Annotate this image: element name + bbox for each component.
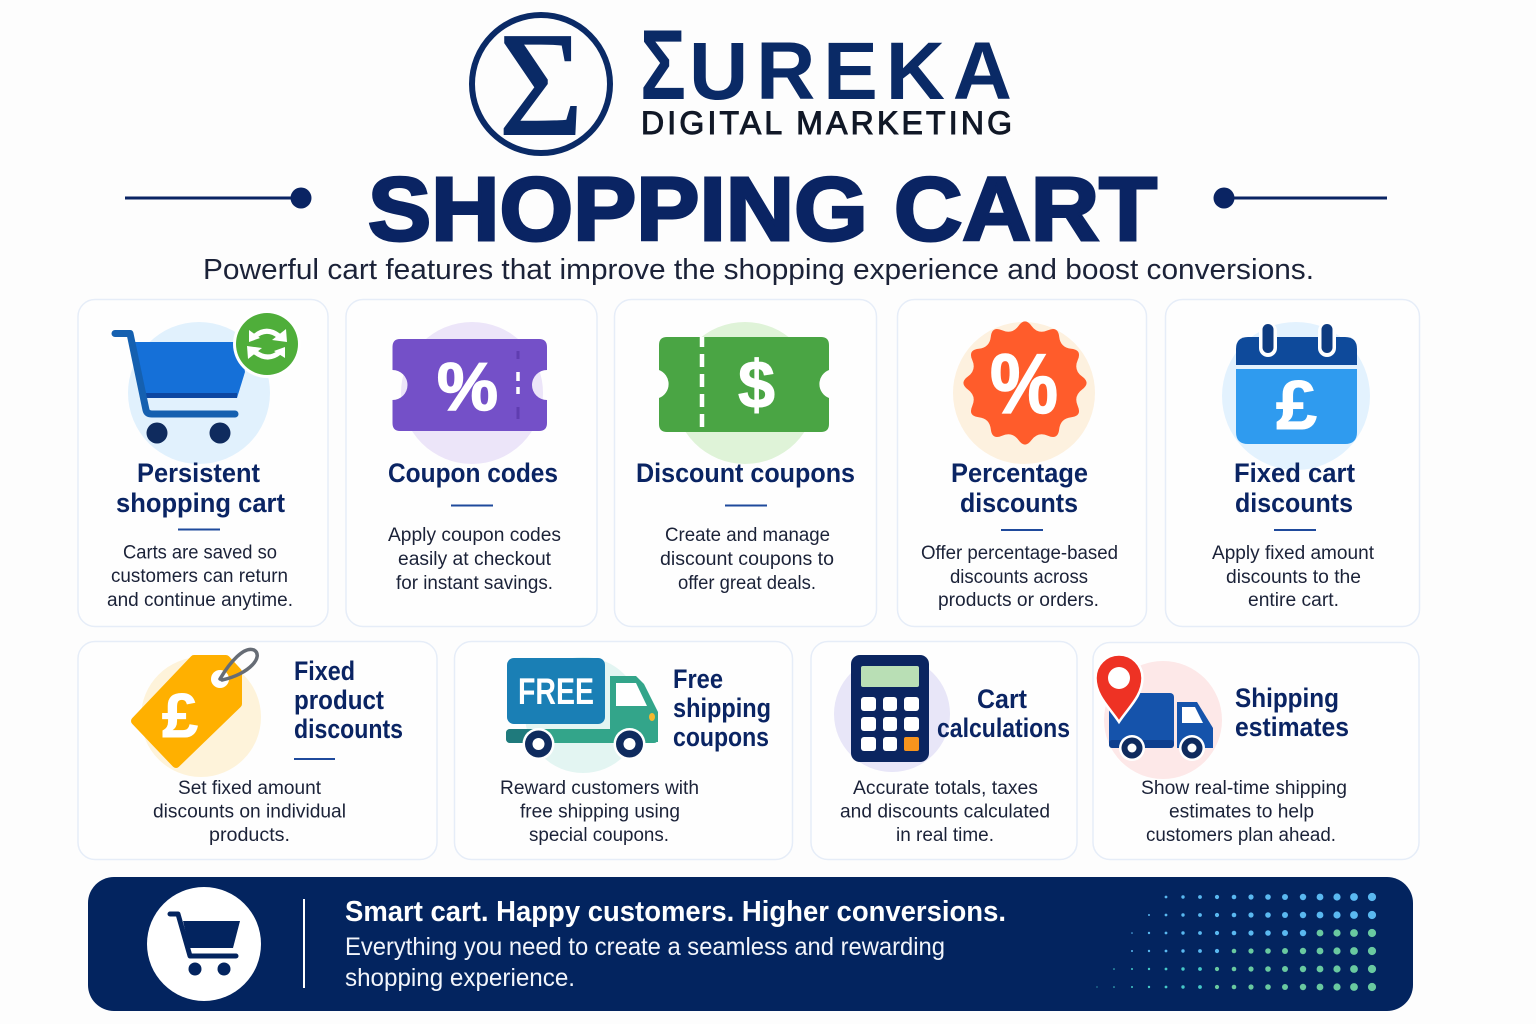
description: special coupons. xyxy=(529,825,669,846)
title: SHOPPING CART xyxy=(368,160,1157,260)
description xyxy=(660,525,834,594)
icon: blue calendar with pound sign: £ xyxy=(1276,366,1317,444)
description: products or orders. xyxy=(938,590,1099,611)
logo: Eureka Digital Marketing xyxy=(472,3,1012,167)
description: easily at checkout xyxy=(398,549,552,570)
description: Show real-time shipping xyxy=(1141,778,1347,799)
panel: shipping estimates xyxy=(1093,642,1419,860)
icon: yellow price tag xyxy=(135,649,261,777)
panel: cart calculations xyxy=(811,642,1077,860)
banner headline: Smart cart. Happy customers. Higher conversions. xyxy=(345,896,1006,928)
icon: shopping cart with sync badge xyxy=(115,310,301,464)
icon: yellow price tag: £ xyxy=(162,682,198,751)
icon: free delivery truck xyxy=(506,657,658,773)
dot pattern xyxy=(1096,893,1376,991)
description: Apply coupon codes xyxy=(388,525,561,546)
heading: Free xyxy=(673,664,723,694)
icon: green dollar ticket xyxy=(659,322,829,464)
icon: purple coupon ticket: % xyxy=(437,349,498,425)
banner text xyxy=(345,933,945,992)
heading xyxy=(673,664,771,752)
panel: discount coupons xyxy=(614,300,876,626)
heading: discounts xyxy=(294,714,403,744)
logo emblem: sigma in circle: Σ xyxy=(499,3,583,167)
heading: Shipping xyxy=(1235,683,1339,713)
description: discounts to the xyxy=(1226,567,1361,588)
heading: shipping xyxy=(673,693,771,723)
description: Offer percentage-based xyxy=(921,543,1118,564)
description xyxy=(1141,778,1347,846)
heading: shopping cart xyxy=(116,488,285,518)
description: Apply fixed amount xyxy=(1212,543,1375,564)
panel: free shipping coupons xyxy=(454,642,792,860)
description: Reward customers with xyxy=(500,778,699,799)
description: discount coupons to xyxy=(660,549,834,570)
heading: Cart xyxy=(977,684,1027,714)
description: and continue anytime. xyxy=(107,590,293,611)
description: Accurate totals, taxes xyxy=(853,778,1038,799)
description: free shipping using xyxy=(520,802,680,822)
logo wordmark letters: UREKA xyxy=(689,26,1012,117)
description: and discounts calculated xyxy=(840,802,1050,822)
description xyxy=(153,778,346,846)
icon: delivery truck with location pin xyxy=(1096,654,1222,779)
description: entire cart. xyxy=(1248,590,1339,611)
heading xyxy=(951,458,1088,518)
heading: product xyxy=(294,685,384,715)
description xyxy=(1212,543,1375,611)
panel: persistent shopping cart xyxy=(78,300,328,626)
heading: Fixed cart xyxy=(1234,458,1355,488)
icon: purple coupon ticket xyxy=(392,322,547,464)
description: estimates to help xyxy=(1169,802,1314,822)
heading: Discount coupons xyxy=(636,458,855,488)
description: Set fixed amount xyxy=(178,778,322,799)
banner text: Everything you need to create a seamless and rewarding xyxy=(345,933,945,961)
panel: fixed cart discounts xyxy=(1166,300,1420,626)
description: in real time. xyxy=(896,825,994,846)
description: customers can return xyxy=(111,566,288,587)
icon: orange percent badge xyxy=(953,321,1095,464)
heading: Coupon codes xyxy=(388,458,558,488)
logo wordmark: Σ xyxy=(640,9,686,120)
heading xyxy=(1234,458,1355,518)
title: right ornament xyxy=(1214,188,1387,208)
banner xyxy=(88,877,1413,1011)
description xyxy=(388,525,561,594)
description: Create and manage xyxy=(665,525,830,546)
heading: Fixed xyxy=(294,656,355,686)
description xyxy=(921,543,1118,611)
panel: fixed product discounts xyxy=(78,642,437,860)
panel: coupon codes xyxy=(346,300,597,626)
logo tagline: DIGITAL MARKETING xyxy=(641,105,1012,141)
heading: discounts xyxy=(1235,488,1353,518)
icon: cart in white circle xyxy=(147,887,261,1001)
heading: coupons xyxy=(673,722,769,752)
description: customers plan ahead. xyxy=(1146,825,1336,846)
icon: free delivery truck: FREE xyxy=(518,671,594,712)
icon: orange percent badge: % xyxy=(990,337,1058,431)
heading: Percentage xyxy=(951,458,1088,488)
description: offer great deals. xyxy=(678,573,816,594)
heading xyxy=(294,656,403,744)
panel: percentage discounts xyxy=(898,300,1146,626)
description xyxy=(500,778,699,846)
subtitle: Powerful cart features that improve the shopping experience and boost conversions. xyxy=(203,254,1314,286)
description: discounts on individual xyxy=(153,802,346,822)
description: products. xyxy=(209,825,290,846)
description xyxy=(107,542,293,611)
heading: discounts xyxy=(960,488,1078,518)
banner text: shopping experience. xyxy=(345,964,575,992)
heading: Persistent xyxy=(137,458,260,488)
icon: green dollar ticket: $ xyxy=(738,347,775,423)
heading: estimates xyxy=(1235,712,1349,742)
heading: calculations xyxy=(937,713,1070,743)
description: discounts across xyxy=(950,567,1088,588)
description: Carts are saved so xyxy=(123,542,277,564)
description xyxy=(840,778,1050,846)
title: left ornament xyxy=(125,188,312,208)
heading xyxy=(937,684,1070,743)
icon: calculator xyxy=(834,655,950,772)
icon: blue calendar with pound sign xyxy=(1222,322,1370,470)
logo emblem: sigma in circle xyxy=(472,3,610,167)
description: for instant savings. xyxy=(396,573,553,594)
heading xyxy=(116,458,285,518)
heading xyxy=(1235,683,1349,742)
